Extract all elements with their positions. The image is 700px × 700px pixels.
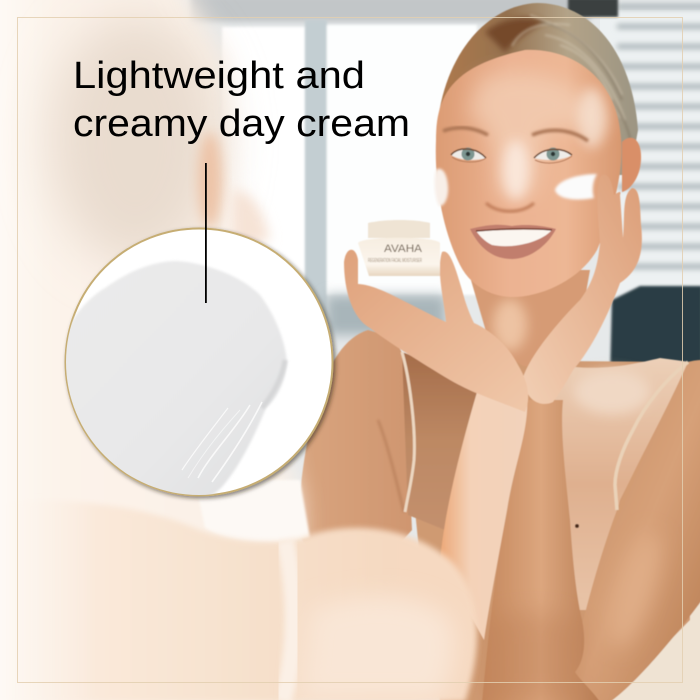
heading: Lightweight and <box>73 55 365 97</box>
callout line <box>205 163 207 303</box>
blurred collar <box>195 480 310 542</box>
background: dark counter <box>610 286 700 378</box>
nose highlight <box>503 140 529 200</box>
product jar: AVAHA <box>384 243 423 255</box>
product jar <box>358 220 440 276</box>
heading: creamy day cream <box>73 103 410 145</box>
hair <box>436 3 638 175</box>
right hand <box>523 175 642 404</box>
neck highlight <box>493 299 527 351</box>
skin underlay <box>400 360 690 700</box>
right arm <box>560 360 700 700</box>
nose shadow <box>486 203 534 211</box>
straps <box>402 352 414 512</box>
left hand <box>344 250 528 412</box>
heading <box>73 55 410 145</box>
cream swipe: cheek left <box>435 169 448 206</box>
mole <box>575 524 579 528</box>
blurred strap <box>282 540 294 700</box>
dress <box>605 596 700 700</box>
neck <box>468 270 590 372</box>
cream swatch <box>60 261 287 500</box>
woman <box>297 3 700 700</box>
product jar: REGENERATION FACIAL MOISTURISER <box>368 258 422 264</box>
chest highlight <box>574 370 650 414</box>
foreground blurred figure <box>0 0 477 700</box>
texture circle <box>60 228 332 500</box>
forearm: rear <box>440 377 527 640</box>
chest <box>530 358 690 610</box>
blurred head <box>50 15 220 265</box>
left shoulder <box>297 330 412 610</box>
forearm lower shade <box>482 613 582 700</box>
face <box>436 50 621 297</box>
shaded chest <box>402 352 480 530</box>
cream swipe: cheek right <box>555 174 597 199</box>
armpit crease <box>378 420 404 512</box>
mouth <box>470 225 556 259</box>
eyes <box>451 148 572 163</box>
background: window blinds <box>568 0 700 300</box>
forearm: front <box>482 400 600 700</box>
arm highlight <box>599 527 671 653</box>
eyebrows <box>443 128 488 135</box>
forehead highlight <box>468 73 608 195</box>
ear <box>622 138 641 192</box>
blurred shoulder <box>0 500 477 700</box>
